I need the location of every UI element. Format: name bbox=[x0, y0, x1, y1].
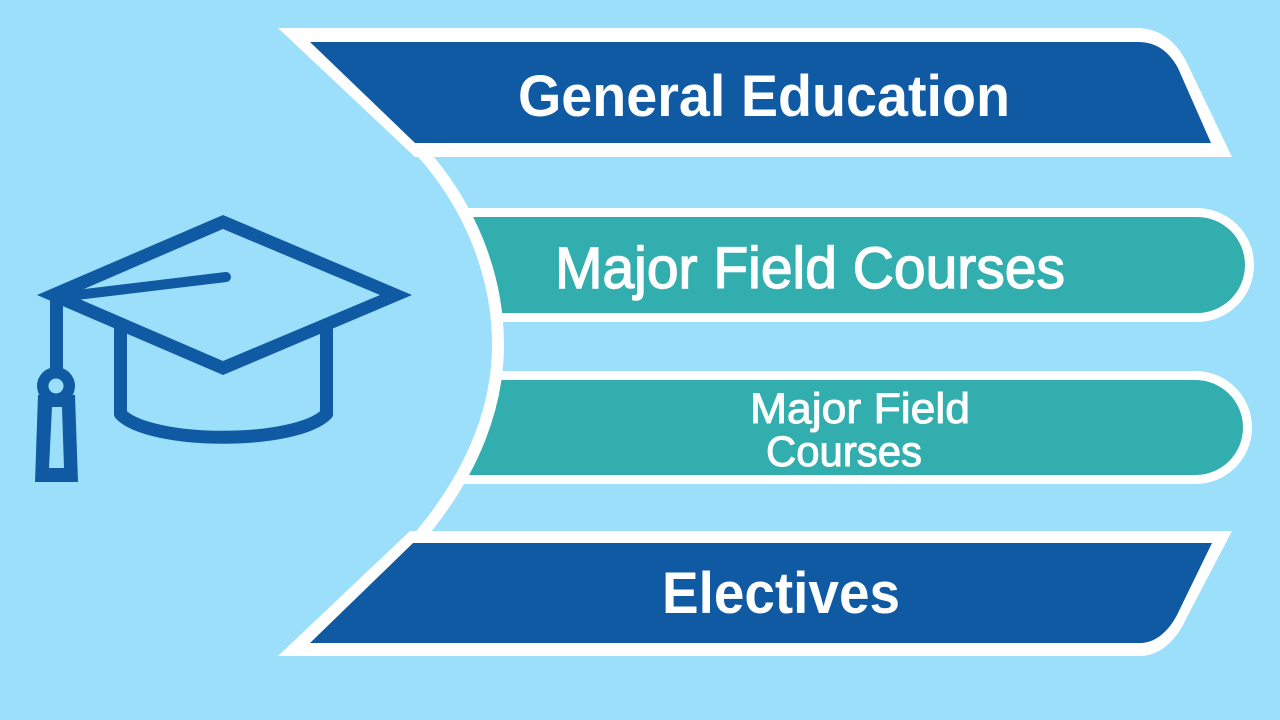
heading: Major Field Courses two lines: Major Field bbox=[750, 385, 970, 433]
panel: Electives bbox=[278, 531, 1232, 656]
curved divider bbox=[0, 150, 498, 536]
icon: graduation cap bbox=[35, 215, 412, 482]
panel: General Education bbox=[278, 28, 1232, 157]
heading: Major Field Courses: Major Field Courses bbox=[555, 236, 1065, 301]
heading: General Education: General Education bbox=[518, 64, 1010, 129]
heading: Electives: Electives bbox=[662, 561, 900, 626]
heading: Major Field Courses two lines: Courses bbox=[766, 428, 922, 476]
panel: Major Field Courses upper bbox=[440, 208, 1254, 322]
panel: Major Field Courses lower bbox=[440, 371, 1252, 484]
heading: Major Field Courses two lines bbox=[750, 385, 970, 476]
